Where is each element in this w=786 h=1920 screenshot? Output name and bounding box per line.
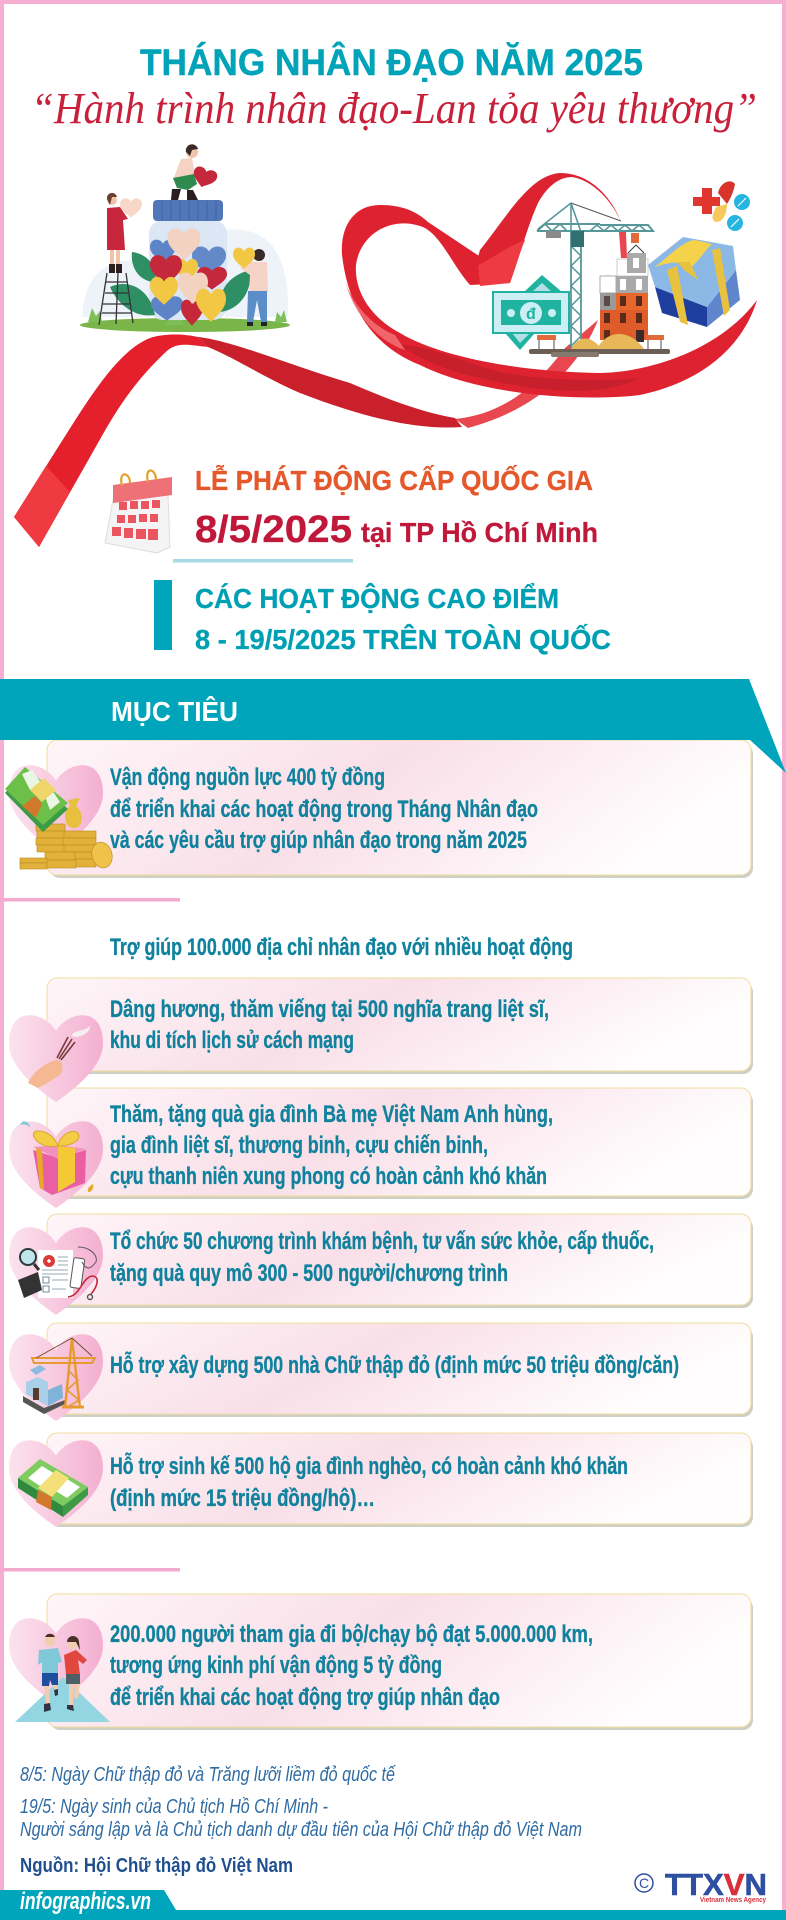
card 7: walking and running: tương ứng kinh phí vận động 5 tỷ đồng <box>110 1652 442 1679</box>
text: Vận động nguồn lực 400 tỷ đồng <box>110 764 385 791</box>
icon: medicine <box>693 181 750 231</box>
note: 19/5: 19/5: Ngày sinh của Chủ tịch Hồ Chí Minh - <box>20 1796 328 1818</box>
ladder <box>99 273 133 325</box>
note: 19/5 <box>20 1796 582 1841</box>
calculator <box>18 1272 42 1298</box>
card 7: walking and running <box>47 1594 753 1730</box>
card 3: gifts: gia đình liệt sĩ, thương binh, cựu chiến binh, <box>110 1132 488 1159</box>
red ribbon <box>14 173 757 547</box>
jar <box>149 200 227 320</box>
card 1: fundraising <box>47 740 753 878</box>
building <box>600 259 648 342</box>
icon: heart with runners <box>9 1618 110 1722</box>
document <box>38 1250 73 1298</box>
logo: TTXVN: TTXVN <box>665 1867 767 1902</box>
icon: banknote <box>493 275 569 350</box>
hearts in jar <box>150 228 227 326</box>
card 3: gifts: cựu thanh niên xung phong có hoàn cảnh khó khăn <box>110 1163 547 1190</box>
illustration: crane and building <box>529 203 670 357</box>
card 2: incense: khu di tích lịch sử cách mạng <box>110 1027 354 1054</box>
text: để triển khai các hoạt động trong Tháng Nhân đạo <box>110 796 538 823</box>
card 3: gifts: Thăm, tặng quà gia đình Bà mẹ Việt Nam Anh hùng, <box>110 1101 553 1128</box>
card 6: livelihood: (định mức 15 triệu đồng/hộ)… <box>110 1485 375 1512</box>
gold bag <box>65 798 82 828</box>
barriers <box>537 335 664 349</box>
card 7: walking and running: 200.000 người tham gia đi bộ/chạy bộ đạt 5.000.000 km, <box>110 1621 593 1648</box>
icon: banknote: đ <box>526 306 536 323</box>
sand piles <box>571 334 644 349</box>
card 6: livelihood <box>47 1433 753 1527</box>
icon: gift box <box>648 237 740 327</box>
money <box>5 767 68 832</box>
runner: man <box>38 1634 62 1712</box>
leaves <box>110 252 250 315</box>
card 4: medical <box>47 1214 753 1308</box>
icon: heart with crane <box>9 1334 103 1421</box>
launch place: tại TP Hồ Chí Minh <box>361 517 598 548</box>
text: và các yêu cầu trợ giúp nhân đạo trong năm 2025 <box>110 827 527 854</box>
icon: heart with banknotes <box>9 1440 103 1527</box>
banner: objectives: MỤC TIÊU <box>111 696 238 727</box>
peak dates: 8 - 19/5/2025 TRÊN TOÀN QUỐC <box>195 623 611 655</box>
launch date: 8/5/2025 <box>195 509 352 551</box>
teal bar <box>154 580 172 650</box>
icon: heart with gift <box>9 1121 103 1208</box>
woman on ladder <box>107 193 142 273</box>
stethoscope <box>68 1247 97 1300</box>
hook and block <box>627 233 646 273</box>
card 2: incense <box>47 978 753 1074</box>
card 4: medical: tặng quà quy mô 300 - 500 người/chương trình <box>110 1260 508 1287</box>
base <box>529 349 670 357</box>
building <box>23 1365 65 1414</box>
card 7: walking and running: để triển khai các hoạt động trợ giúp nhân đạo <box>110 1684 500 1711</box>
text <box>110 764 538 854</box>
crane <box>537 203 653 347</box>
grass <box>88 308 287 325</box>
note: 8/5: 8/5: Ngày Chữ thập đỏ và Trăng lưỡi liềm đỏ quốc tế <box>20 1764 397 1786</box>
illustration: people filling heart jar <box>80 144 290 332</box>
icon: calendar <box>105 470 172 553</box>
man on right <box>233 248 268 326</box>
icon: heart with medical tools <box>9 1227 103 1315</box>
card 2: incense: Dâng hương, thăm viếng tại 500 nghĩa trang liệt sĩ, <box>110 996 549 1023</box>
note: 19/5: Người sáng lập và là Chủ tịch danh dự đầu tiên của Hội Chữ thập đỏ Việt Nam <box>20 1819 582 1841</box>
logo: TTXVN: Vietnam News Agency <box>700 1895 767 1904</box>
subheading: 100,000 addresses: Trợ giúp 100.000 địa chỉ nhân đạo với nhiều hoạt động <box>110 934 573 961</box>
footer band: infographics.vn <box>20 1888 151 1915</box>
runner: woman <box>64 1636 87 1711</box>
crane <box>32 1338 95 1408</box>
icon: heart with incense <box>9 1015 103 1102</box>
card 3: gifts <box>47 1088 753 1199</box>
man on jar <box>171 144 219 200</box>
icon: heart with money and coins <box>5 765 115 870</box>
logo: TTXVN: C <box>639 1875 649 1891</box>
magnifier <box>20 1249 39 1270</box>
source: Nguồn: Hội Chữ thập đỏ Việt Nam <box>20 1855 293 1877</box>
footer band <box>0 1888 786 1920</box>
title: THÁNG NHÂN ĐẠO NĂM 2025 <box>140 41 643 83</box>
card 5: housing <box>47 1323 753 1417</box>
heading: national launch: LỄ PHÁT ĐỘNG CẤP QUỐC GIA <box>195 464 593 496</box>
ground <box>80 318 290 332</box>
coins <box>20 824 115 870</box>
banner: objectives <box>0 679 786 773</box>
heading: peak activities: CÁC HOẠT ĐỘNG CAO ĐIỂM <box>195 582 559 614</box>
